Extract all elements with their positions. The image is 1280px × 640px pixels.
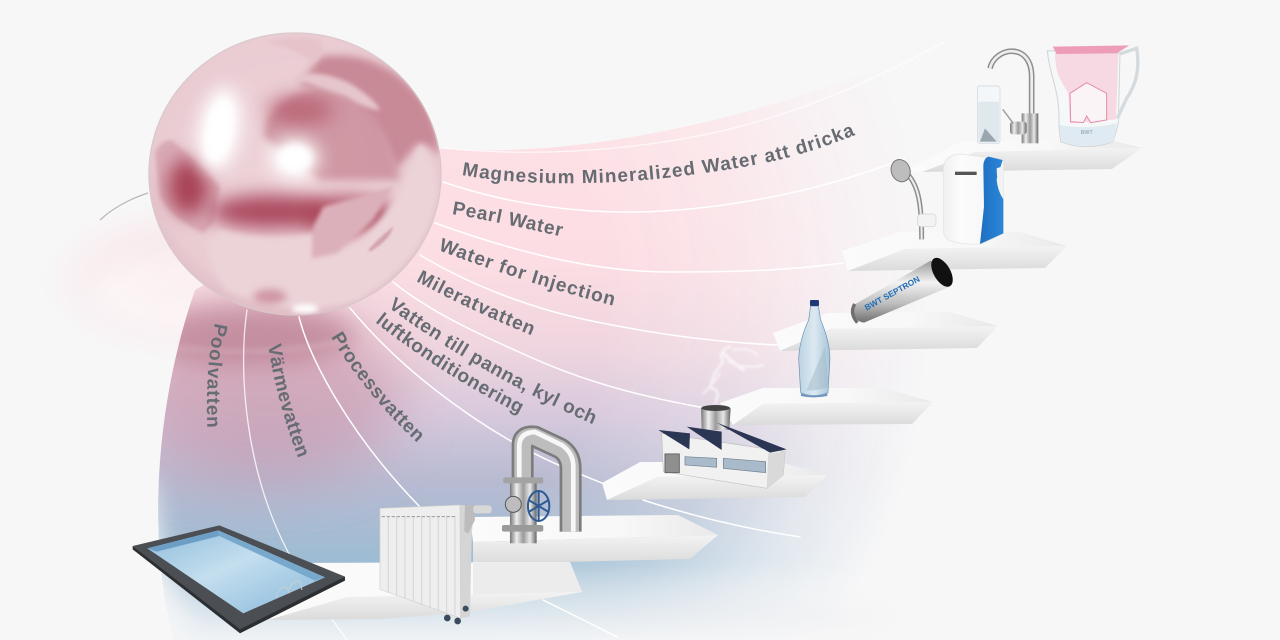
label: Mileratvatten: Mileratvatten: [417, 270, 534, 335]
label: Vatten till panna, kyl och: Vatten till panna, kyl och: [392, 296, 596, 424]
specular highlights: [191, 84, 319, 178]
stair step 3: [773, 312, 998, 351]
label: Värmevatten: Värmevatten: [268, 343, 306, 458]
label: Pearl Water: Pearl Water: [453, 201, 564, 236]
icon: radiator: [380, 505, 492, 624]
colour fan from pink to blue: [158, 105, 858, 640]
soft floor shadow: [410, 606, 890, 638]
white flow lines between water types: [244, 42, 945, 640]
dark ocean shading: [155, 55, 439, 233]
icon: BWT Septron membrane tube: BWT SEPTRON: [863, 274, 921, 312]
infographic canvas: [84, 32, 1141, 640]
icon: faucet, glass and pink water pitcher: [977, 45, 1138, 147]
label: Water for Injection: Water for Injection: [441, 238, 614, 306]
icon: glass water bottle: [799, 300, 830, 397]
icon: shower head and water softener: [888, 154, 1003, 244]
icon: swimming pool: [133, 525, 345, 633]
icon: BWT Septron membrane tube: [852, 254, 957, 323]
stair step 1: [905, 140, 1142, 172]
stair step 4: [720, 388, 933, 425]
label: luftkonditionering: luftkonditionering: [376, 312, 523, 416]
globe: [148, 32, 442, 316]
label: Poolvatten: Poolvatten: [206, 324, 228, 427]
icon: industrial chrome pipe with valve: [502, 432, 573, 543]
icon: factory building with chimney and steam: [658, 347, 787, 488]
icon: faucet, glass and pink water pitcher: BWT: [1081, 130, 1093, 136]
label: Processvatten: Processvatten: [332, 331, 422, 442]
stair step 2: [842, 232, 1067, 271]
stair step 6: [470, 515, 718, 564]
pale continents and lower hemisphere: [206, 37, 438, 313]
stair step 5: [602, 462, 827, 500]
stair step 7: [268, 562, 582, 620]
water ripples around the globe: [40, 193, 340, 360]
label: Magnesium Mineralized Water att dricka: Magnesium Mineralized Water att dricka: [462, 126, 856, 184]
